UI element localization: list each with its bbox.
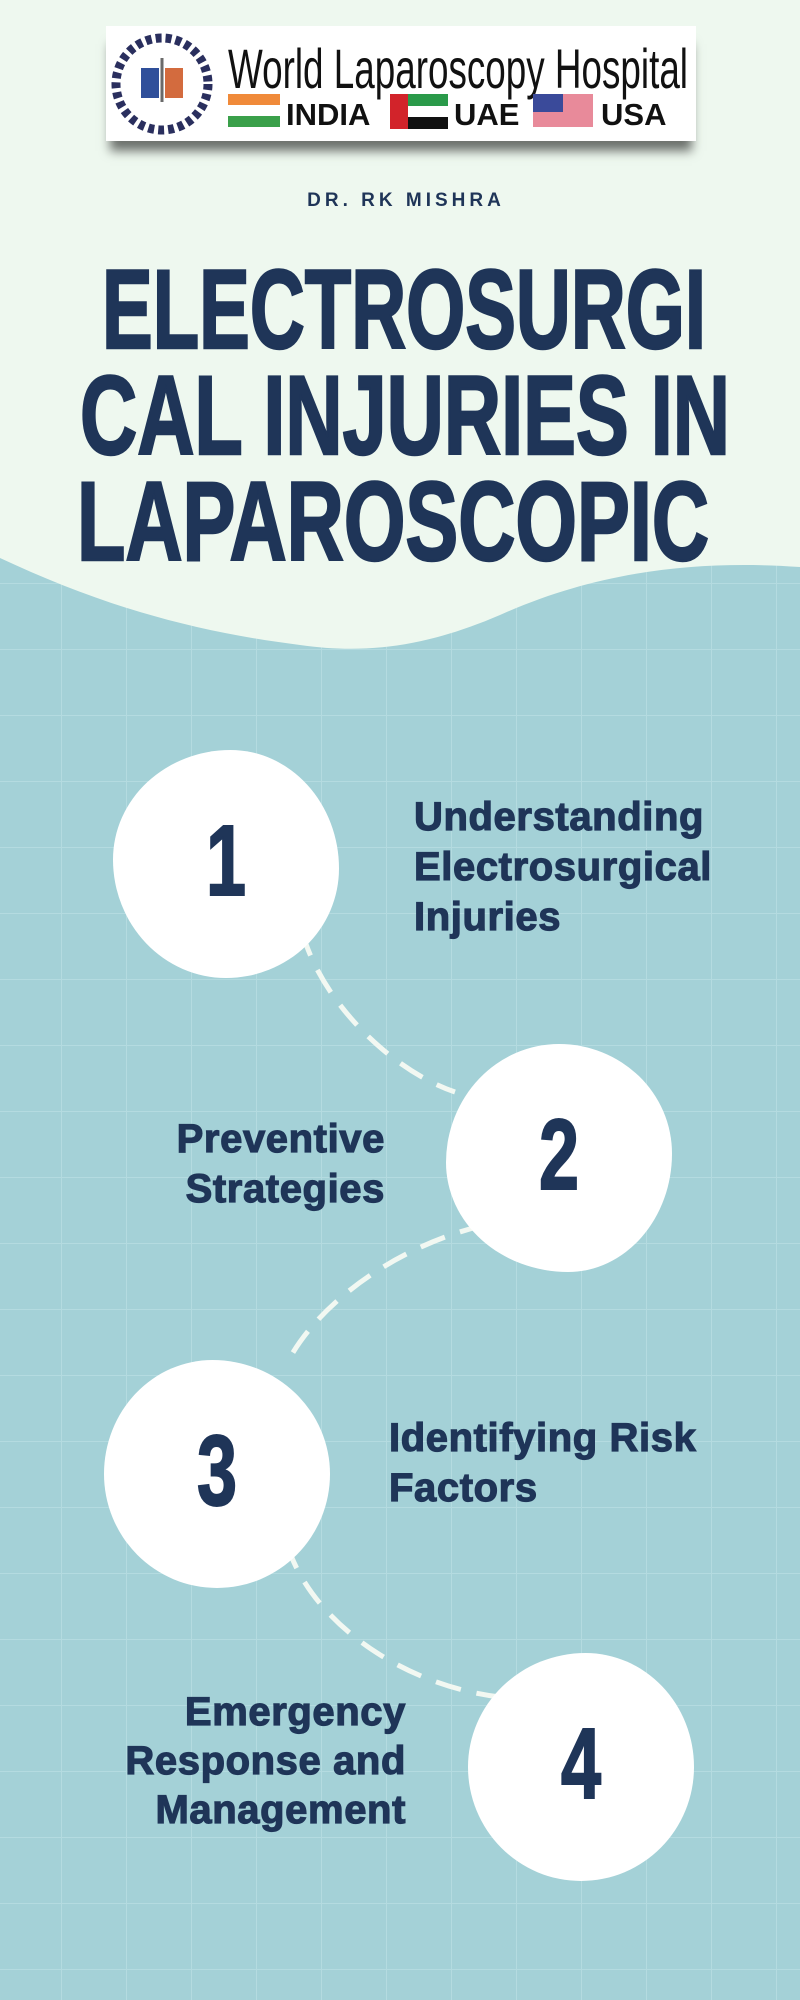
logo text: [228, 37, 688, 132]
number 3: 3: [197, 1415, 237, 1527]
step 3: [104, 1360, 330, 1588]
label 4: Emergency: [185, 1690, 406, 1734]
title: [77, 247, 730, 580]
logo text: UAE: [454, 97, 519, 132]
blob 4: [468, 1653, 694, 1881]
label 4: [125, 1690, 406, 1832]
logo: [106, 26, 696, 141]
blob 3: [104, 1360, 330, 1588]
label 1: [414, 795, 712, 940]
logo text: INDIA: [286, 97, 370, 132]
label 3: Identifying Risk: [389, 1416, 696, 1460]
step 1: [113, 750, 339, 978]
step 2: [446, 1044, 672, 1272]
label 4: Management: [156, 1788, 406, 1832]
icon: emblem: [112, 34, 212, 134]
step 4: [468, 1653, 694, 1881]
blob 2: [446, 1044, 672, 1272]
number 1: 1: [206, 805, 246, 917]
label 4: Response and: [125, 1739, 406, 1783]
label 1: Electrosurgical: [414, 845, 712, 889]
label 1: Injuries: [414, 895, 561, 939]
label 3: Factors: [389, 1466, 538, 1510]
logo text: USA: [601, 97, 666, 132]
number 4: 4: [561, 1708, 601, 1820]
number 2: 2: [539, 1099, 579, 1211]
label 2: Strategies: [186, 1167, 385, 1211]
blob 1: [113, 750, 339, 978]
author: DR. RK MISHRA: [307, 190, 505, 211]
label 1: Understanding: [414, 795, 704, 839]
label 2: [177, 1117, 385, 1212]
label 3: [389, 1416, 697, 1510]
label 2: Preventive: [177, 1117, 385, 1161]
